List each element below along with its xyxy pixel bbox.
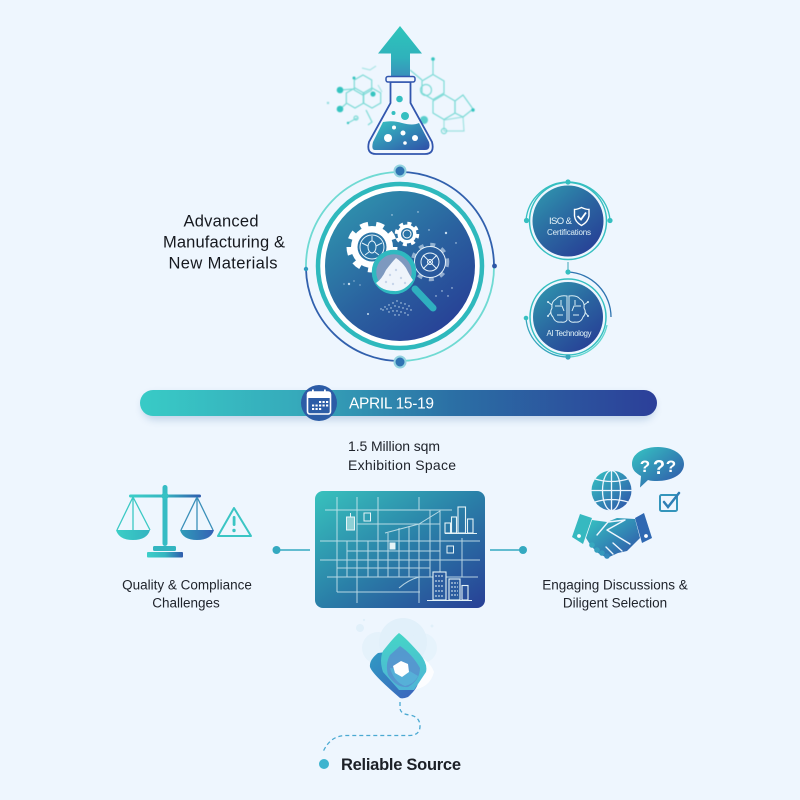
icon: handshake with globe and questions: [572, 447, 684, 559]
magnifier: [374, 252, 433, 308]
outline gear: [412, 244, 448, 280]
reliable source dot: [319, 759, 329, 769]
map grid: [320, 497, 480, 603]
speech bubble: ?: [666, 457, 676, 476]
outer orbit ring: [304, 166, 497, 368]
warning triangle: [218, 508, 251, 536]
connector: left: [272, 546, 310, 554]
icon: upward arrow: [378, 26, 422, 78]
label: quality and compliance: [122, 578, 252, 610]
label: quality and compliance: Quality & Compliance: [122, 578, 252, 592]
date text: APRIL 15-19: [349, 396, 434, 412]
icon: calendar: [301, 385, 337, 421]
brain icon: [548, 296, 588, 322]
badge text: AI Technology: [546, 329, 592, 338]
left pan: [117, 497, 150, 530]
connector: right: [490, 546, 527, 554]
label: reliable source: Reliable Source: [341, 756, 461, 774]
checkbox: [660, 493, 679, 511]
handshake: [572, 513, 652, 559]
connector between badges: [567, 262, 569, 272]
powder particles: [343, 211, 457, 316]
label: engaging discussions: Engaging Discussions &: [542, 578, 688, 592]
globe: [592, 470, 632, 510]
disc: [325, 191, 475, 341]
teal ring: [318, 184, 482, 348]
date bar: [140, 385, 657, 421]
heading: Advanced Manufacturing and New Materials: [163, 212, 285, 272]
heading: exhibition space: Exhibition Space: [348, 457, 456, 473]
badge text: ISO &: [549, 216, 573, 227]
panel: ISO and certifications badge: [524, 179, 613, 260]
dashed connector to reliable source: [323, 702, 420, 752]
shield icon: [574, 208, 589, 226]
map buildings: [427, 507, 477, 600]
label: engaging discussions: Diligent Selection: [563, 596, 667, 610]
panel: main circle with gears: [304, 166, 497, 368]
right pan: [181, 497, 213, 530]
map markers: [346, 513, 454, 553]
heading: exhibition space: [348, 438, 456, 473]
speech bubble: [632, 447, 684, 488]
small gear: [396, 224, 418, 244]
icon: molecular structures behind flask: [327, 57, 475, 134]
heading: exhibition space: 1.5 Million sqm: [348, 438, 440, 454]
base: [153, 546, 176, 551]
speech bubble: ?: [653, 457, 665, 479]
heading: Advanced Manufacturing and New Materials: Advanced: [184, 212, 258, 230]
icon: flask: [368, 76, 433, 154]
label: quality and compliance: Challenges: [152, 596, 220, 610]
post: [162, 485, 168, 546]
panel: AI technology badge: [524, 269, 611, 360]
beam: [129, 494, 201, 498]
speech bubble: ?: [640, 457, 650, 476]
panel: ISO and certifications badge: Certifications: [547, 228, 591, 237]
heading: Advanced Manufacturing and New Materials: New Materials: [168, 254, 278, 272]
large gear: [349, 224, 395, 270]
panel: exhibition floor map: [315, 491, 485, 608]
icon: balance scale with warning: [116, 485, 251, 558]
icon: reliable source drop: [356, 618, 437, 698]
halo shapes: [356, 618, 437, 666]
heading: Advanced Manufacturing and New Materials: Manufacturing &: [163, 234, 285, 252]
label: engaging discussions: [542, 578, 688, 610]
